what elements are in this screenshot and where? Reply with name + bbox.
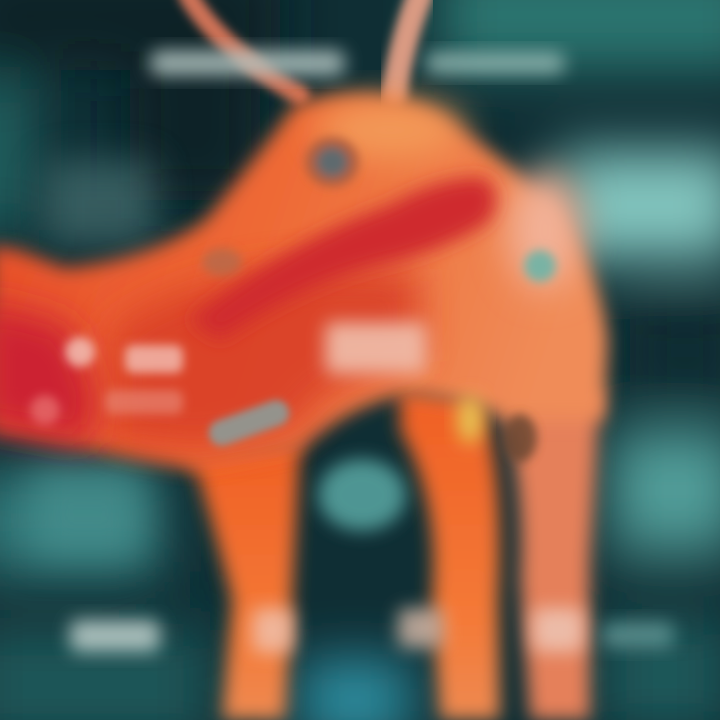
red mouth arm [190, 178, 496, 340]
text block: bottom leg label three [532, 608, 584, 652]
text block: center label [325, 322, 427, 374]
red lower shading [110, 266, 420, 450]
creature belly highlight [507, 170, 583, 290]
text block: bottom leg label two [398, 608, 444, 648]
antenna: left [188, 0, 300, 95]
text block: bottom leg label one [252, 608, 294, 653]
icon: grey oval label [205, 396, 293, 450]
panel: upper left text card [45, 160, 155, 245]
creature head glow [315, 100, 465, 160]
icon: small spot on neck [202, 248, 242, 276]
icon: yellow highlight [457, 396, 483, 444]
title: blurred heading left [150, 50, 345, 76]
text block: bottom right label [602, 622, 674, 648]
creature legs [190, 390, 600, 720]
icon: eye [305, 137, 359, 187]
icon: dark spot on flank [503, 414, 537, 462]
text block: bottom left label [70, 620, 160, 652]
antenna: right [394, 0, 420, 95]
panel: lower left text card [30, 465, 145, 560]
title: blurred heading right [425, 52, 565, 74]
text block: left label [30, 337, 183, 425]
creature body [0, 95, 608, 470]
creature red left shading [0, 300, 100, 445]
icon: teal spot on body [524, 250, 556, 282]
panel: lower center text card [318, 459, 406, 531]
